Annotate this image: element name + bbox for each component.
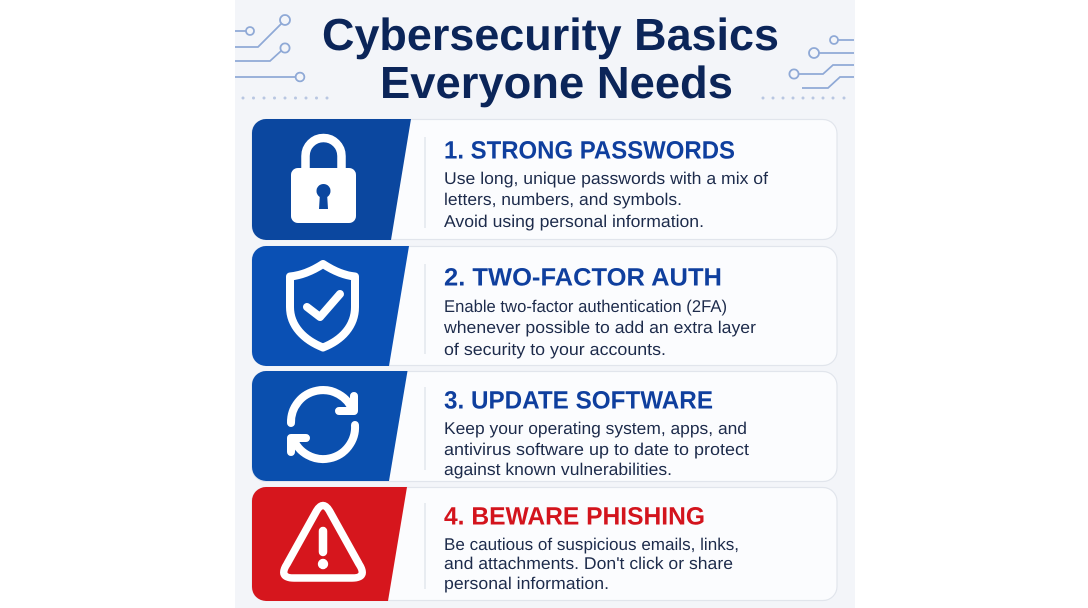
text: two-factor auth description: of security to your accounts. — [444, 340, 666, 359]
text: two-factor auth description: whenever possible to add an extra layer — [443, 318, 756, 337]
heading: update software: 3. UPDATE SOFTWARE — [444, 386, 713, 414]
text: update software description: Keep your operating system, apps, and — [444, 419, 747, 438]
text: two-factor auth description: Enable two-factor authentication (2FA) — [444, 297, 727, 316]
text: beware phishing description: personal information. — [444, 574, 609, 593]
panel: beware phishing — [252, 487, 837, 601]
background panel — [235, 0, 855, 608]
text: strong passwords description — [444, 169, 768, 231]
icon: refresh arrows — [291, 390, 355, 459]
icon: padlock — [291, 138, 356, 223]
heading: two-factor auth: 2. TWO-FACTOR AUTH — [444, 264, 722, 292]
icon: circuit decoration right — [762, 36, 854, 100]
text: strong passwords description: Use long, unique passwords with a mix of — [444, 169, 768, 188]
text: beware phishing description: Be cautious of suspicious emails, links, — [444, 535, 739, 554]
icon: shield with check — [290, 264, 355, 348]
text: strong passwords description: letters, numbers, and symbols. — [444, 190, 682, 209]
text: update software description: antivirus software up to date to protect — [444, 440, 749, 459]
heading: beware phishing: 4. BEWARE PHISHING — [444, 502, 705, 530]
text: beware phishing description — [444, 535, 739, 593]
heading: strong passwords: 1. STRONG PASSWORDS — [444, 136, 735, 164]
title — [322, 9, 779, 108]
text: update software description: against known vulnerabilities. — [444, 460, 672, 479]
text: beware phishing description: and attachments. Don't click or share — [444, 554, 733, 573]
panel: update software — [252, 371, 837, 482]
panel: strong passwords — [252, 119, 837, 240]
icon: warning triangle — [284, 506, 362, 578]
icon: circuit decoration left — [235, 15, 328, 100]
title: Everyone Needs — [380, 57, 733, 108]
text: update software description — [444, 419, 749, 479]
title: Cybersecurity Basics — [322, 9, 779, 60]
text: two-factor auth description — [443, 297, 756, 359]
text: strong passwords description: Avoid using personal information. — [444, 212, 704, 231]
panel: two-factor auth — [252, 246, 837, 366]
